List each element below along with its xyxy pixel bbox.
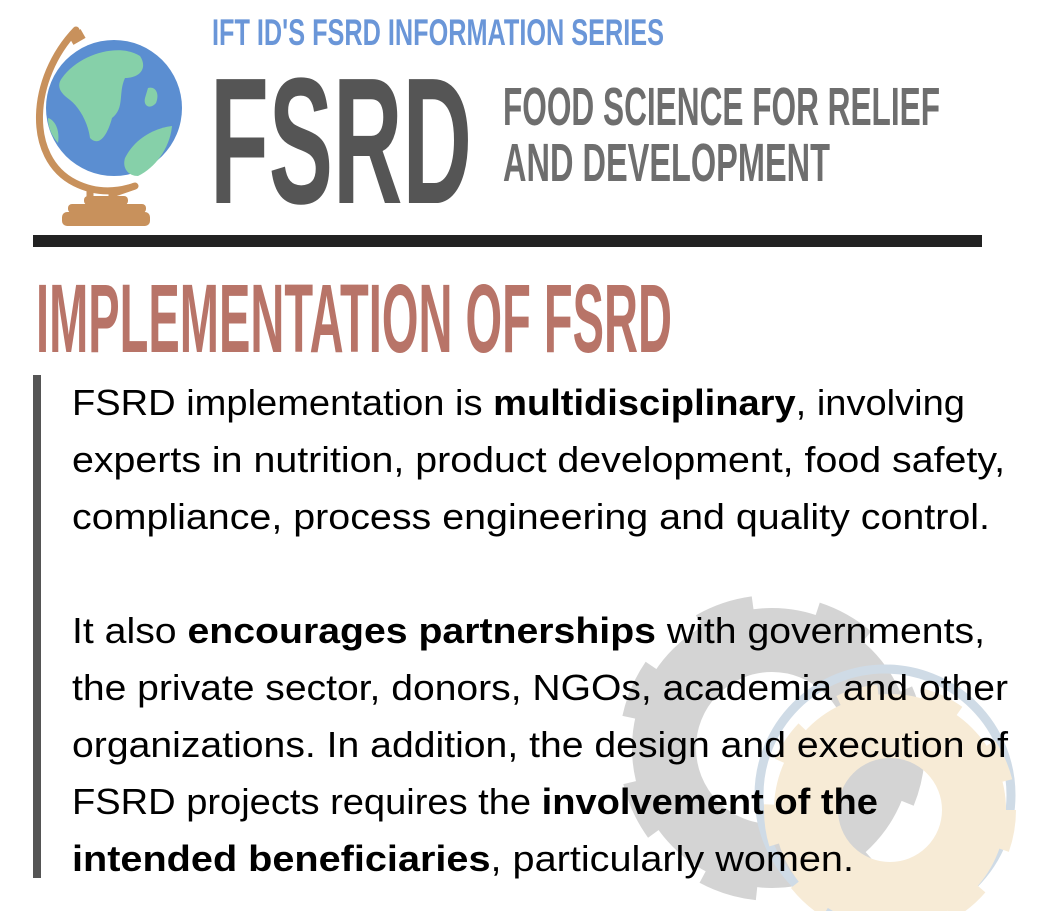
icon: globe [39,29,182,226]
body text [72,382,1009,879]
body text: FSRD implementation is multidisciplinary , involving [72,382,965,423]
left accent bar [33,375,41,878]
body text: It also encourages partnerships with governments, [72,610,985,651]
body text: organizations. In addition, the design and execution of [72,724,1009,765]
series label: IFT ID'S FSRD INFORMATION SERIES [212,12,664,53]
body text: FSRD projects requires the involvement of the [72,781,878,822]
subtitle: AND DEVELOPMENT [503,133,830,193]
body text: experts in nutrition, product development, food safety, [72,439,1005,480]
gear: blue outline [759,669,1011,911]
body text: compliance, process engineering and quality control. [72,496,990,537]
logo text FSRD: FSRD [210,41,472,242]
gear: beige [772,692,1008,911]
header divider bar [33,235,982,247]
body text: the private sector, donors, NGOs, academia and other [72,667,1008,708]
gears background [630,606,1011,911]
body text: intended beneficiaries , particularly women. [72,838,854,879]
gear: gray [630,606,914,890]
subtitle [503,77,940,193]
